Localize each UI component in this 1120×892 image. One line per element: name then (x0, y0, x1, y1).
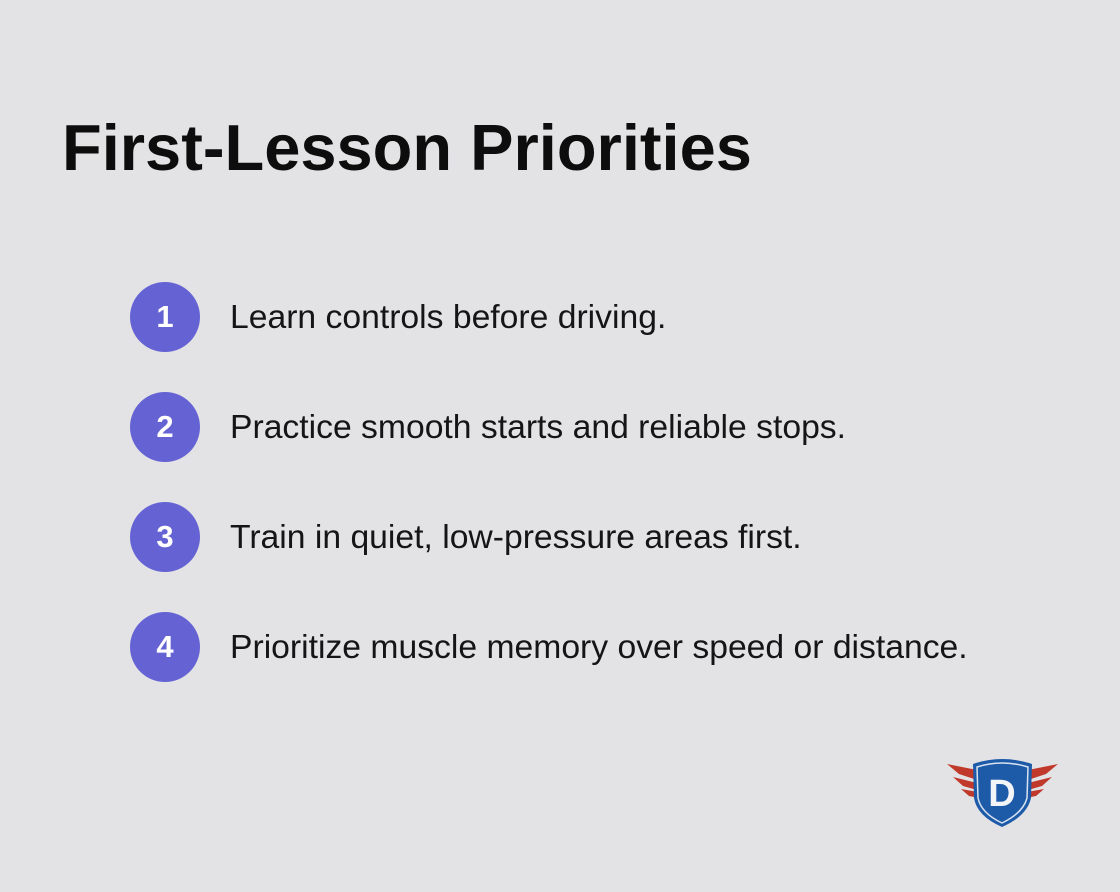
title: First-Lesson Priorities (62, 111, 752, 184)
item 2 (130, 392, 846, 462)
text 3: Train in quiet, low-pressure areas first. (230, 518, 802, 556)
text 2: Practice smooth starts and reliable stops. (230, 408, 846, 446)
number badge 3 (130, 502, 200, 572)
logo: winged shield: D (988, 773, 1016, 815)
text 1: Learn controls before driving. (230, 298, 666, 336)
number badge 4: 4 (156, 629, 174, 664)
logo: winged shield (947, 759, 1058, 827)
item 3 (130, 502, 802, 572)
text 4: Prioritize muscle memory over speed or distance. (230, 628, 968, 666)
number badge 1: 1 (156, 299, 174, 334)
item 4 (130, 612, 968, 682)
number badge 4 (130, 612, 200, 682)
item 1 (130, 282, 666, 352)
number badge 2: 2 (156, 409, 174, 444)
number badge 1 (130, 282, 200, 352)
number badge 3: 3 (156, 519, 174, 554)
number badge 2 (130, 392, 200, 462)
